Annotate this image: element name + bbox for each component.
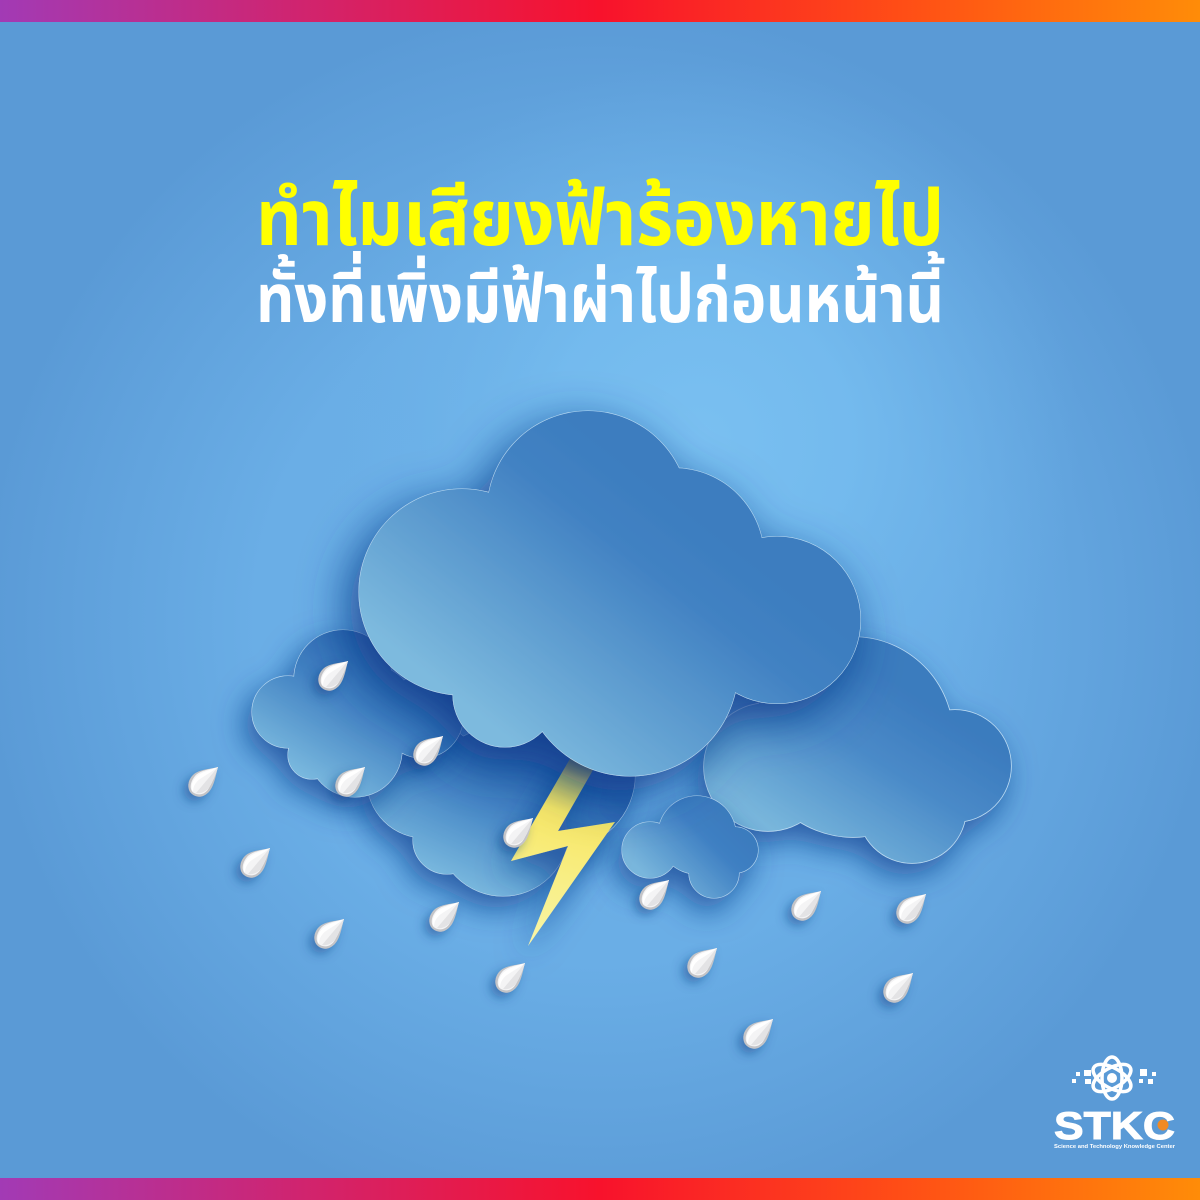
logo accent dot: [1158, 1120, 1168, 1130]
left cloud: [252, 630, 463, 797]
bottom gradient band: [0, 1178, 1200, 1200]
title: [256, 174, 945, 337]
right cloud: [704, 637, 1011, 863]
main cloud: [359, 411, 860, 776]
title line 1: ทำไมเสียงฟ้าร้องหายไป: [256, 174, 944, 262]
logo wordmark: STKC: [1054, 1105, 1175, 1148]
logo tagline: Science and Technology Knowledge Center: [1054, 1144, 1176, 1150]
rain drops: [188, 661, 926, 1049]
lightning bolt: [511, 757, 615, 946]
middle cloud: [367, 702, 635, 896]
small cloud: [622, 796, 758, 898]
top gradient band: [0, 0, 1200, 22]
STKC logo: [1054, 1057, 1176, 1150]
icon: atom: [1072, 1057, 1156, 1099]
title line 2: ทั้งที่เพิ่งมีฟ้าผ่าไปก่อนหน้านี้: [256, 251, 945, 337]
